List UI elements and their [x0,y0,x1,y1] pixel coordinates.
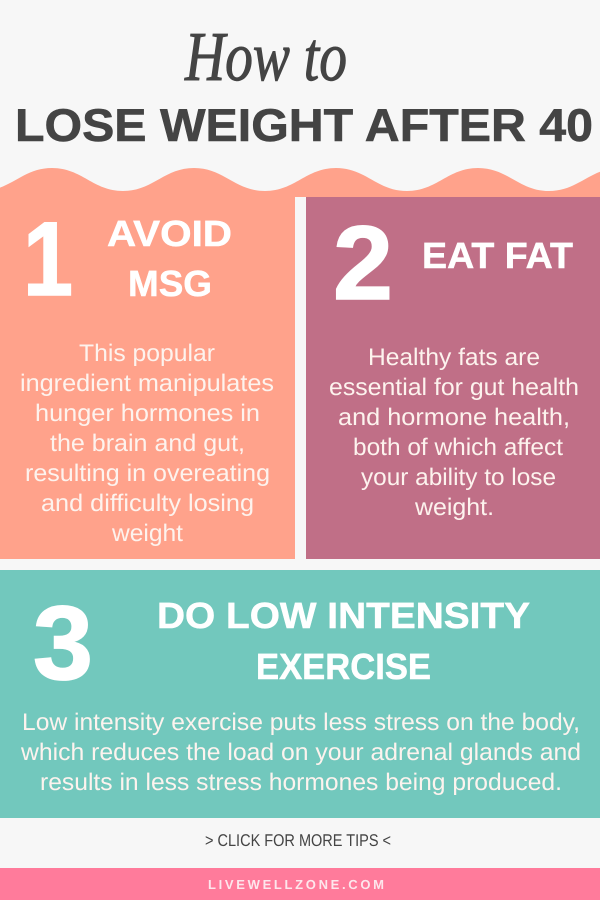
panel: tip 1 avoid MSG [0,197,295,559]
title [15,19,593,151]
main heading: LOSE WEIGHT AFTER 40 [15,99,593,151]
body text: tip 3: Low intensity exercise puts less stress on the body, [22,709,580,736]
heading: eat fat: EAT FAT [422,235,573,276]
heading: low intensity exercise [157,595,530,687]
panel: gap strip [295,197,306,559]
number 3: 3 [33,585,93,702]
body text: tip 2 [329,344,579,521]
body text: tip 1 [20,340,274,547]
website: LIVEWELLZONE.COM [208,877,384,892]
body text: tip 3: results in less stress hormones being produced. [40,769,562,796]
heading: low intensity exercise: EXERCISE [256,646,431,687]
body text: tip 2: weight. [414,494,494,521]
body text: tip 1: and difficulty losing [41,490,254,517]
body text: tip 1: weight [111,520,183,547]
body text: tip 1: This popular [79,340,215,367]
wave divider [0,168,600,210]
script heading: How to: How to [184,19,347,96]
panel: tip 3 low intensity exercise [0,570,600,818]
body text: tip 1: the brain and gut, [50,430,245,457]
call to action: > CLICK FOR MORE TIPS < [205,831,391,850]
body text: tip 2: and hormone health, [338,404,570,431]
body text: tip 2: essential for gut health [329,374,579,401]
body text: tip 1: resulting in overeating [25,460,270,487]
body text: tip 2: Healthy fats are [368,344,540,371]
heading: avoid MSG [107,213,232,304]
body text: tip 3 [20,709,581,796]
body text: tip 3: which reduces the load on your adrenal glands and [20,739,581,766]
number 2: 2 [333,205,393,322]
panel: tip 2 eat fat [306,197,600,559]
body text: tip 1: ingredient manipulates [20,370,274,397]
footer bar [0,868,600,900]
heading: avoid MSG: AVOID [107,213,232,254]
body text: tip 1: hunger hormones in [35,400,260,427]
body text: tip 2: both of which affect [353,434,563,461]
heading: avoid MSG: MSG [128,263,212,304]
heading: low intensity exercise: DO LOW INTENSITY [157,595,530,636]
number 1: 1 [23,201,73,318]
body text: tip 2: your ability to lose [361,464,556,491]
